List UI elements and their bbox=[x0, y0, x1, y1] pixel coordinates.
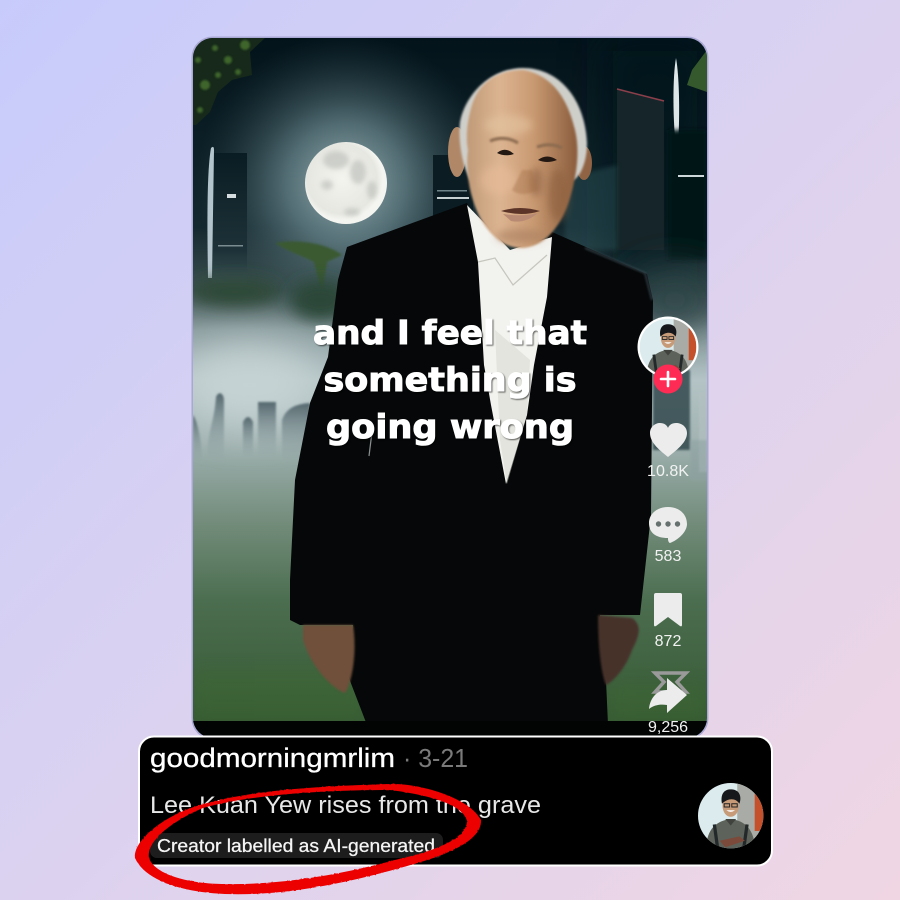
treeline and fog bbox=[180, 270, 720, 425]
video description: Lee Kuan Yew rises from the grave bbox=[150, 792, 541, 819]
centre tower bbox=[433, 155, 473, 216]
shirt bbox=[467, 205, 552, 484]
panel: caption card bbox=[139, 736, 772, 866]
ai-generated label: Creator labelled as AI-generated bbox=[157, 836, 435, 856]
jacket bbox=[290, 203, 653, 725]
share count: 9,256 bbox=[648, 719, 688, 736]
mouth bbox=[501, 208, 540, 222]
gravestones bbox=[193, 392, 310, 451]
moon bbox=[305, 142, 387, 224]
bottom black band bbox=[193, 721, 707, 736]
eyes and brows bbox=[490, 138, 562, 162]
icon: creator avatar with follow button bbox=[638, 316, 698, 394]
panel: video frame bbox=[180, 33, 720, 740]
right towers bbox=[565, 58, 707, 260]
bookmark count: 872 bbox=[655, 633, 681, 650]
icon: bookmark bbox=[654, 593, 682, 626]
video scene bbox=[180, 33, 720, 738]
creator avatar bbox=[698, 783, 763, 851]
dark right sky bbox=[600, 38, 710, 298]
icon: share arrow with hourglass bbox=[649, 673, 687, 713]
username and date: goodmorningmrlim bbox=[150, 743, 395, 773]
hands bbox=[303, 615, 639, 693]
icon: like heart bbox=[650, 423, 687, 457]
person: lee kuan yew bbox=[290, 68, 653, 725]
like count: 10.8K bbox=[647, 463, 689, 480]
video caption: and I feel that bbox=[313, 313, 587, 352]
video caption: going wrong bbox=[326, 407, 574, 446]
face bbox=[467, 70, 577, 248]
icon: comment bubble bbox=[649, 507, 687, 543]
ears bbox=[448, 127, 466, 177]
video caption: something is bbox=[324, 360, 576, 399]
left tower bbox=[207, 147, 247, 283]
red hand-drawn circle bbox=[135, 784, 481, 894]
moon glow bbox=[220, 51, 459, 283]
comment count: 583 bbox=[655, 548, 681, 565]
nose bbox=[512, 170, 534, 194]
trees bbox=[193, 38, 707, 295]
right gravestone bbox=[653, 370, 707, 480]
grass bbox=[193, 670, 707, 720]
face shading bbox=[480, 115, 568, 243]
video caption bbox=[313, 313, 587, 446]
username and date: · 3-21 bbox=[403, 743, 468, 773]
hair bbox=[459, 68, 587, 180]
